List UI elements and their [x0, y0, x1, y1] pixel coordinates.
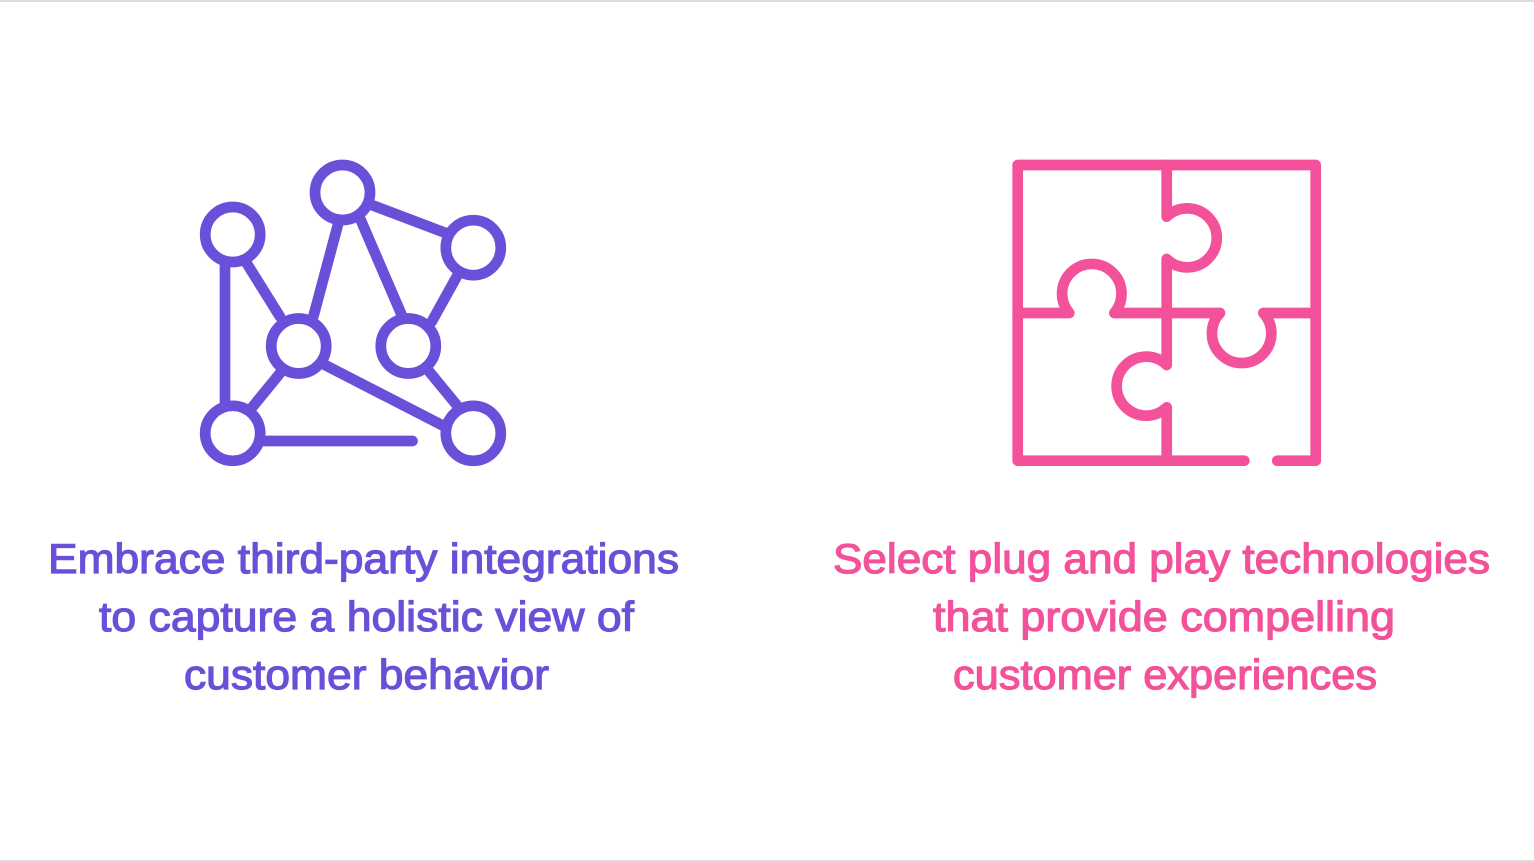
text: embrace third-party integrations: Embrace third-party integrations — [48, 535, 679, 582]
text: select plug and play technologies — [833, 535, 1490, 698]
text: embrace third-party integrations — [48, 535, 679, 698]
icon: four piece jigsaw puzzle — [1018, 165, 1316, 461]
text: select plug and play technologies: customer experiences — [953, 651, 1377, 698]
text: select plug and play technologies: that provide compelling — [933, 593, 1395, 640]
text: embrace third-party integrations: to capture a holistic view of — [99, 593, 634, 640]
panel: plug and play technologies — [833, 165, 1490, 698]
text: select plug and play technologies: Select plug and play technologies — [833, 535, 1490, 582]
icon: network of connected nodes — [205, 165, 501, 461]
panel: third-party integrations — [48, 165, 679, 698]
text: embrace third-party integrations: customer behavior — [184, 651, 549, 698]
